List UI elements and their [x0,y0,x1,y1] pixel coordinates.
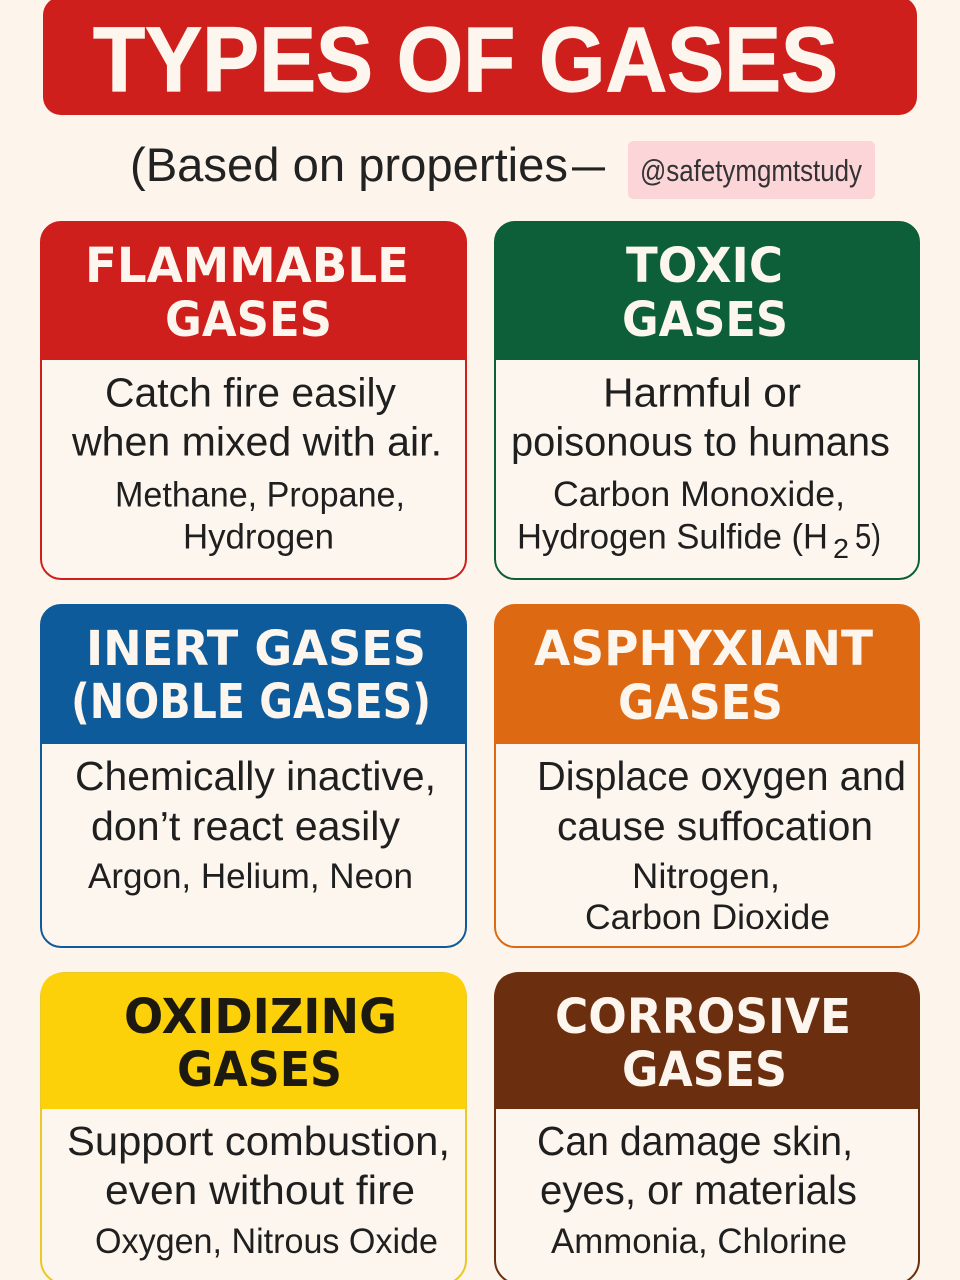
oxidizing heading [124,989,397,1098]
toxic examples: Hydrogen Sulfide (H [517,518,828,556]
toxic header [495,222,919,360]
oxidizing header [41,973,466,1109]
corrosive heading [555,989,851,1098]
asphyxiant heading [534,621,873,731]
watermark tag: @safetymgmtstudy [640,153,862,188]
inert examples: Argon, Helium, Neon [88,857,413,896]
asphyxiant header [495,605,919,744]
toxic examples: Carbon Monoxide, [553,475,845,514]
flammable examples: Methane, Propane, [115,476,405,514]
corrosive description [537,1118,857,1213]
inert heading: (NOBLE GASES) [71,674,431,730]
asphyxiant description: cause suffocation [557,803,873,849]
flammable examples [115,476,405,556]
subtitle: — [572,138,605,191]
flammable description: Catch fire easily [105,370,396,416]
oxidizing description: Support combustion, [67,1118,450,1164]
inert heading [71,621,431,730]
asphyxiant description: Displace oxygen and [537,753,906,799]
flammable heading: GASES [165,292,332,348]
corrosive examples: Ammonia, Chlorine [551,1222,847,1261]
asphyxiant examples: Carbon Dioxide [585,898,830,937]
toxic heading: GASES [622,292,788,348]
title: TYPES OF GASES [93,9,838,111]
corrosive heading: GASES [622,1042,787,1098]
panel: oxidizing gases [41,973,466,1280]
oxidizing description [67,1118,450,1213]
flammable description: when mixed with air. [71,418,442,464]
asphyxiant examples: Nitrogen, [632,857,780,896]
flammable heading: FLAMMABLE [85,238,409,294]
inert heading: INERT GASES [86,621,426,677]
toxic heading: TOXIC [626,238,783,294]
panel: asphyxiant gases [495,605,919,947]
inert description: don’t react easily [91,803,400,849]
asphyxiant heading: ASPHYXIANT [534,621,873,677]
toxic description [511,370,890,464]
panel: toxic gases [495,222,919,579]
corrosive description: eyes, or materials [540,1167,857,1213]
toxic description: poisonous to humans [511,418,890,464]
inert description [75,753,436,849]
toxic examples [517,475,881,564]
panel: flammable gases [41,222,466,579]
toxic examples: 5) [855,518,881,556]
inert description: Chemically inactive, [75,753,436,799]
asphyxiant heading: GASES [618,675,783,731]
asphyxiant examples [585,857,830,937]
title banner [43,0,917,115]
oxidizing heading: OXIDIZING [124,989,397,1045]
subtitle: (Based on properties [130,138,568,191]
oxidizing description: even without fire [105,1167,415,1213]
oxidizing examples: Oxygen, Nitrous Oxide [95,1222,438,1261]
inert header [41,605,466,744]
flammable header [41,222,466,360]
corrosive header [495,973,919,1109]
corrosive heading: CORROSIVE [555,989,851,1045]
toxic heading [622,238,788,348]
panel: corrosive gases [495,973,919,1280]
watermark tag [628,141,875,199]
toxic examples: 2 [833,533,849,564]
flammable heading [85,238,409,348]
toxic description: Harmful or [603,370,801,416]
asphyxiant description [537,753,906,849]
panel: inert gases [41,605,466,947]
corrosive description: Can damage skin, [537,1118,853,1164]
oxidizing heading: GASES [177,1042,342,1098]
flammable description [71,370,442,464]
flammable examples: Hydrogen [183,518,334,556]
